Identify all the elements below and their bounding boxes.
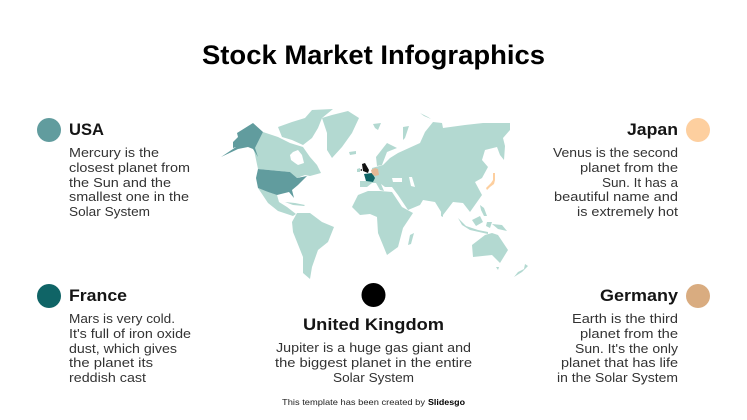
map: Iceland	[349, 151, 356, 155]
map: USA highlighted	[221, 123, 307, 198]
text: USA description: closest planet from	[69, 160, 190, 175]
map: New Zealand	[514, 264, 528, 277]
text: Germany description: planet that has life	[561, 355, 678, 370]
icon: Germany marker	[686, 284, 710, 308]
text: France description	[69, 311, 191, 385]
icon: France marker	[37, 284, 61, 308]
map: Borneo and Sulawesi	[472, 216, 492, 228]
map: Ireland	[357, 168, 360, 172]
text: France description: It's full of iron oxide	[69, 326, 191, 341]
map: Philippines	[480, 205, 487, 216]
map: UK highlighted	[360, 163, 369, 173]
panel: Germany	[557, 284, 710, 385]
map: Sumatra and Java	[458, 218, 488, 234]
map: Scandinavia	[376, 143, 397, 166]
text: Japan description: is extremely hot	[577, 204, 678, 219]
panel: United Kingdom	[275, 283, 472, 385]
map: Canada	[254, 132, 321, 178]
map: Africa	[352, 191, 413, 255]
title: Stock Market Infographics	[202, 40, 545, 70]
text: France description: the planet its	[69, 355, 154, 370]
panel: USA	[37, 118, 190, 219]
icon: USA marker	[37, 118, 61, 142]
footer credit: Slidesgo	[428, 397, 465, 407]
heading: Japan: Japan	[627, 120, 678, 139]
map: Arctic Russia islands	[403, 113, 431, 140]
map: Eurasia	[360, 122, 510, 215]
text: United Kingdom description: Solar System	[333, 370, 414, 385]
map: Mexico and Central America	[258, 188, 296, 216]
footer credit: This template has been created by	[282, 397, 426, 407]
text: USA description: Solar System	[69, 204, 150, 219]
map: Arctic islands	[278, 109, 333, 145]
text: Japan description: planet from the	[580, 160, 678, 175]
text: Germany description: planet from the	[580, 326, 678, 341]
text: France description: reddish cast	[69, 370, 146, 385]
text: France description: dust, which gives	[69, 341, 178, 356]
icon: Japan marker	[686, 118, 710, 142]
text: USA description	[69, 145, 190, 219]
map: Greenland	[322, 111, 359, 158]
world map	[221, 109, 528, 279]
text: Japan description: beautiful name and	[554, 189, 678, 204]
heading: France: France	[69, 286, 127, 305]
text: Germany description: Sun. It's the only	[575, 341, 679, 356]
map: France highlighted	[364, 173, 375, 182]
text: Germany description: in the Solar System	[557, 370, 678, 385]
map: South America	[292, 213, 334, 279]
heading: United Kingdom: United Kingdom	[303, 315, 444, 334]
text: United Kingdom description	[275, 340, 472, 385]
heading: USA: USA	[69, 120, 104, 139]
text: Japan description: Venus is the second	[553, 145, 678, 160]
icon: United Kingdom marker	[362, 283, 386, 307]
map: Sri Lanka	[441, 212, 443, 217]
map: New Guinea	[492, 224, 507, 231]
map: Madagascar	[408, 233, 414, 245]
text: United Kingdom description: the biggest planet in the entire	[275, 355, 472, 370]
map: Svalbard	[373, 123, 381, 130]
map: Germany highlighted	[371, 168, 379, 176]
text: USA description: the Sun and the	[69, 175, 171, 190]
panel: France	[37, 284, 191, 385]
text: USA description: Mercury is the	[69, 145, 159, 160]
heading: Germany: Germany	[600, 286, 679, 305]
text: France description: Mars is very cold.	[69, 311, 175, 326]
text: United Kingdom description: Jupiter is a huge gas giant and	[276, 340, 471, 355]
map: Australia	[472, 233, 508, 263]
text: Japan description: Sun. It has a	[602, 175, 679, 190]
text: Germany description: Earth is the third	[572, 311, 678, 326]
text: Japan description	[553, 145, 679, 219]
text: USA description: smallest one in the	[69, 189, 189, 204]
map: Tasmania	[496, 267, 499, 270]
map: Japan highlighted	[486, 173, 495, 190]
panel: Japan	[553, 118, 710, 219]
text: Germany description	[557, 311, 679, 385]
map: Caribbean	[285, 202, 305, 206]
